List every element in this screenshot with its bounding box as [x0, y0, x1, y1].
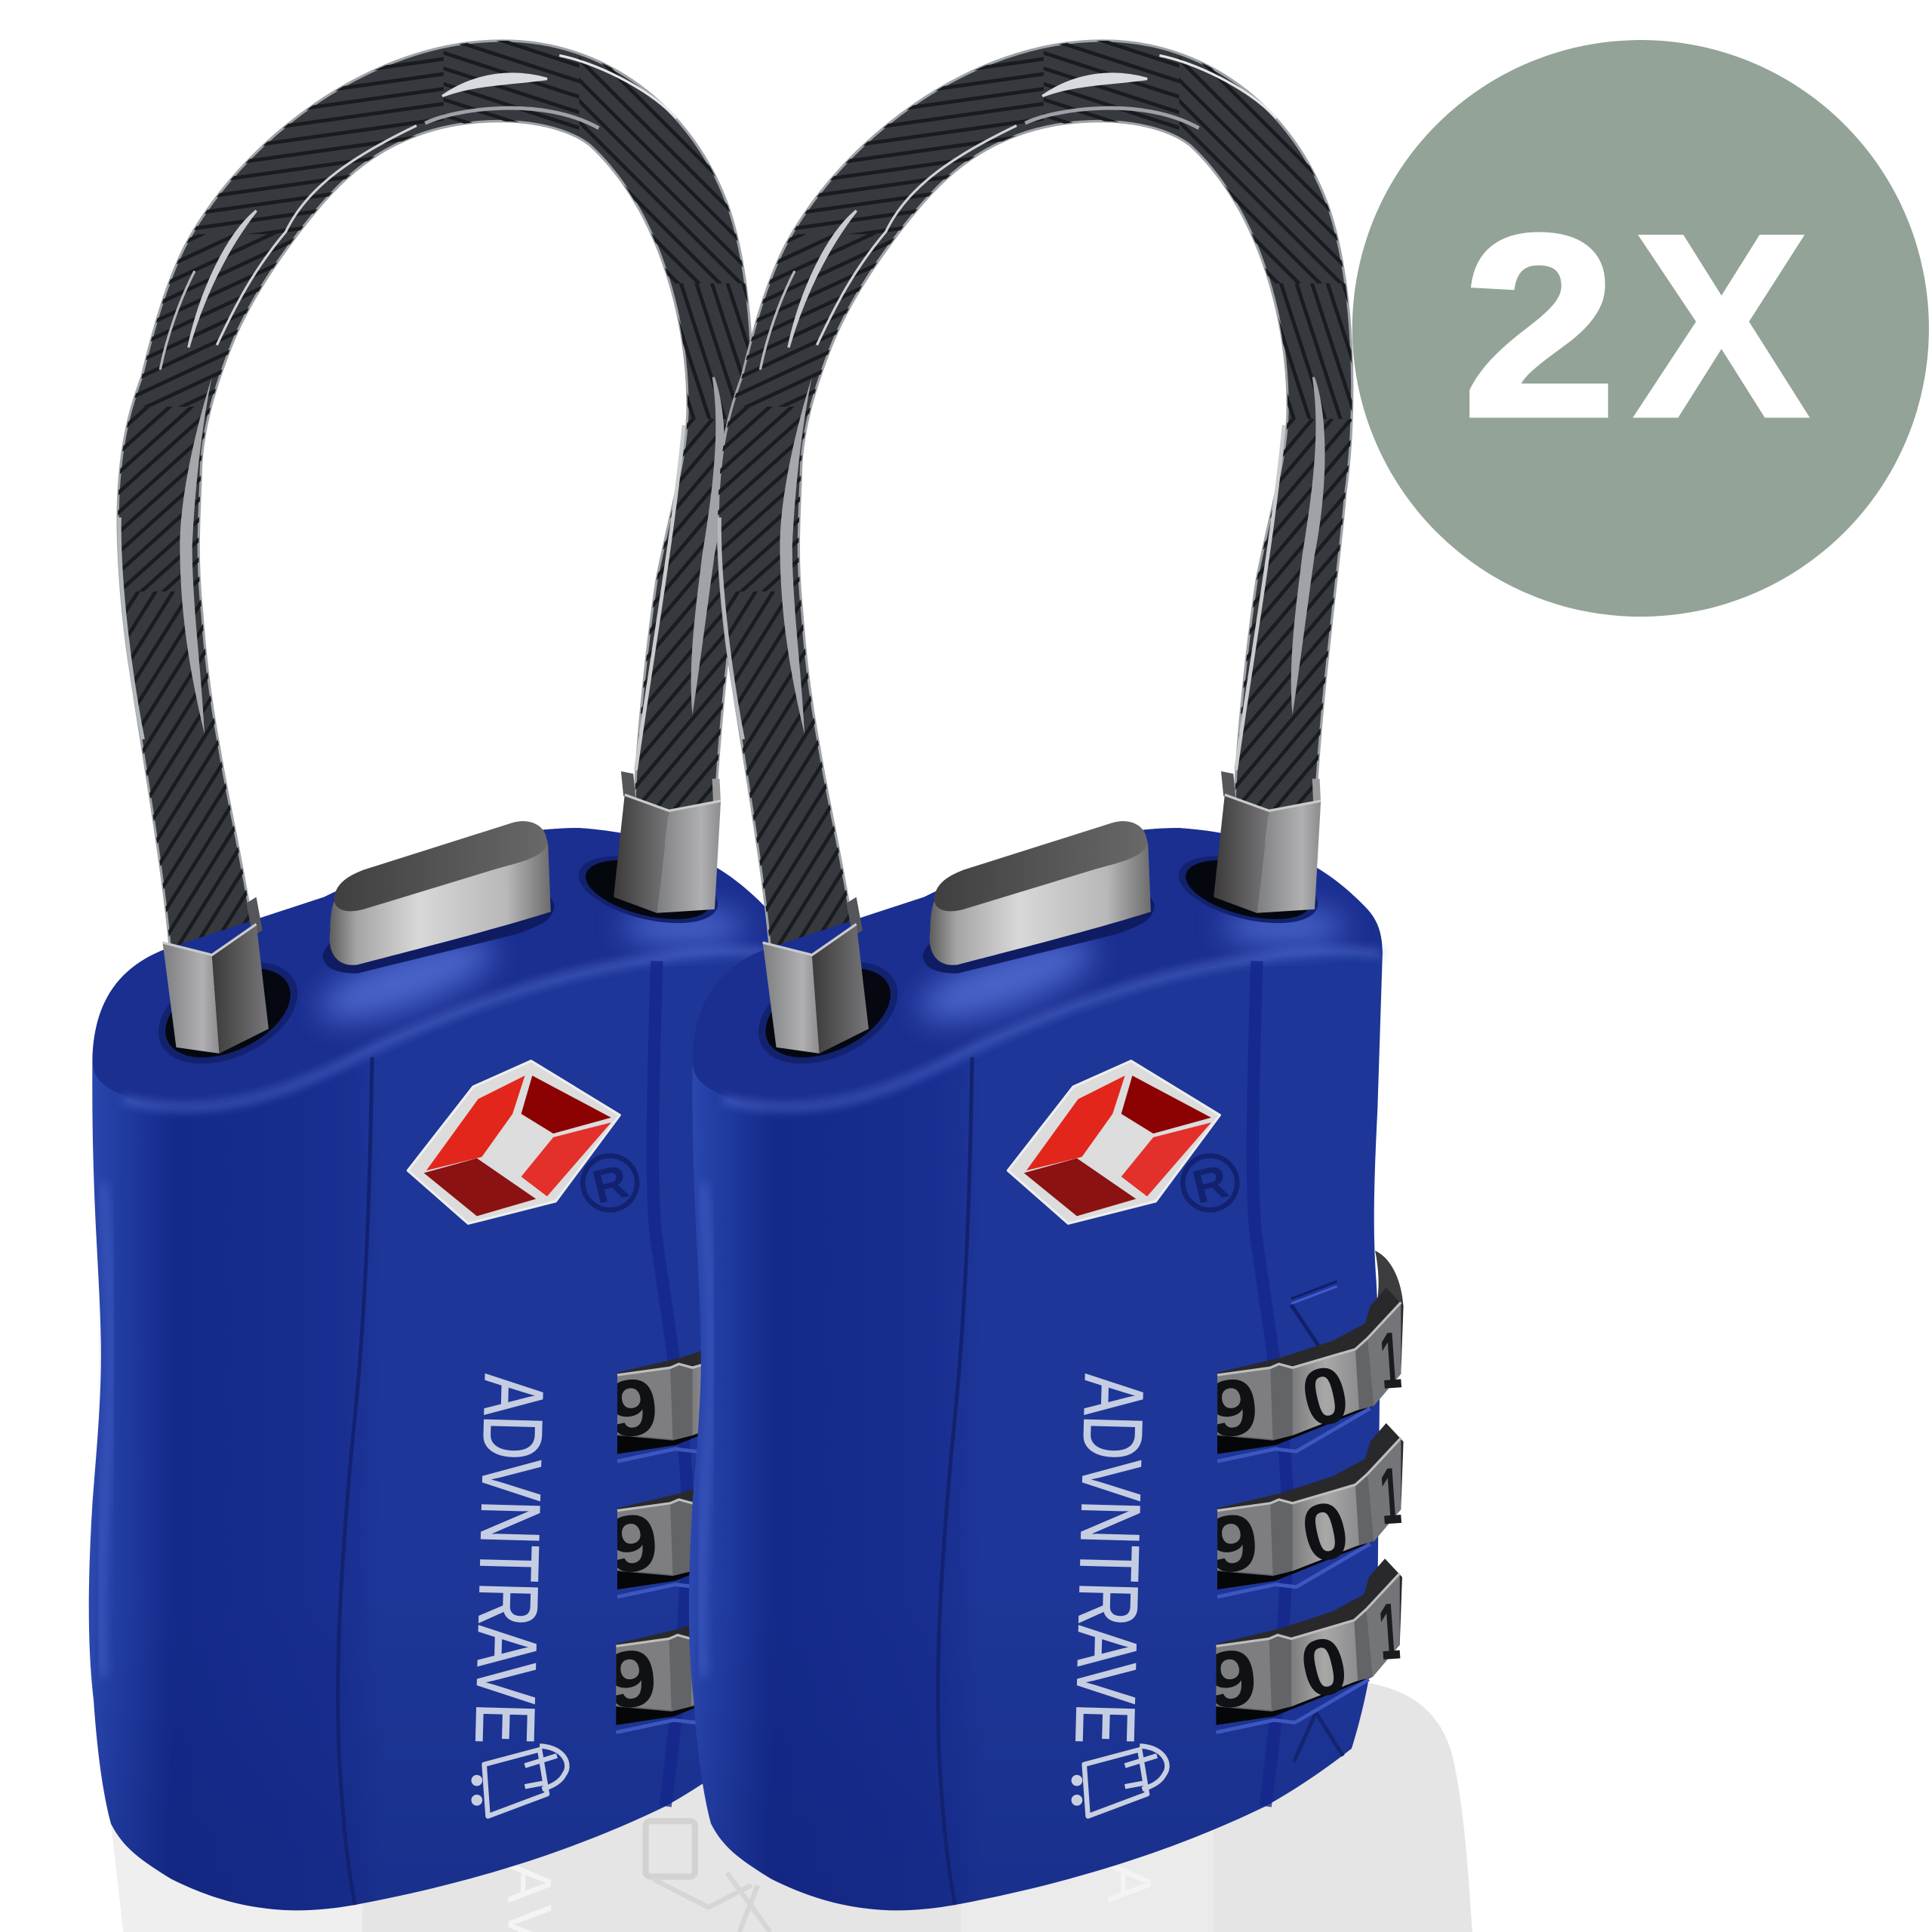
brand wordmark: ADVNTRAVE [457, 1374, 561, 1746]
badge: 2X quantity: X [1635, 181, 1809, 470]
cable ferrule right [1214, 771, 1321, 913]
combination dial 1 [1202, 1287, 1404, 1461]
icon: TSA diamond logo [408, 1061, 620, 1223]
icon: TSA diamond logo [1008, 1061, 1220, 1223]
left padlock [89, 25, 803, 1910]
combination dial 3: 0 [1293, 1620, 1356, 1716]
lock body [689, 828, 1383, 1910]
combination dial 2: 1 [1377, 1452, 1404, 1542]
reflection below locks: A [1094, 1862, 1164, 1904]
badge: 2X quantity: 2 [1463, 182, 1617, 471]
registered mark: R [1188, 1155, 1233, 1214]
registered mark: R [588, 1155, 633, 1214]
combination dial 1 [617, 1351, 701, 1463]
combination dial 3: 1 [1377, 1587, 1402, 1677]
combination dial 2 [1202, 1423, 1404, 1597]
right padlock [689, 25, 1404, 1910]
cable shackle [99, 25, 764, 961]
combination dial 3 [616, 1626, 696, 1734]
combination dial 3: 9 [601, 1632, 661, 1727]
combination dial 2: 9 [1202, 1497, 1263, 1591]
cable ferrule left [763, 897, 869, 1054]
combination dial 3 [1201, 1558, 1402, 1733]
combination dial 1: 9 [1202, 1361, 1263, 1455]
dial alignment arrows [1291, 1281, 1343, 1762]
combination dial 2 [617, 1489, 694, 1598]
badge: 2X quantity [1352, 40, 1929, 617]
combination dial 3: 9 [1201, 1632, 1262, 1727]
icon: luggage [471, 1746, 567, 1817]
release button [330, 821, 551, 965]
combination dial 2: 9 [602, 1497, 663, 1591]
combination dial 1: 9 [602, 1361, 663, 1455]
combination dial 1: 1 [1377, 1316, 1404, 1406]
brand wordmark: ADVNTRAVE [1058, 1374, 1161, 1746]
cable ferrule right [614, 771, 721, 913]
cable shackle [699, 25, 1364, 961]
combination dial 1: 0 [1294, 1348, 1357, 1445]
reflection below locks: A [494, 1862, 564, 1904]
lock body [89, 828, 783, 1910]
dial 1 upper hump [1375, 1251, 1404, 1306]
release button [930, 821, 1151, 965]
cable ferrule left [163, 897, 269, 1054]
combination dial 2: 0 [1294, 1484, 1357, 1580]
reflection below locks [111, 1682, 1472, 1932]
icon: luggage [1072, 1746, 1167, 1817]
